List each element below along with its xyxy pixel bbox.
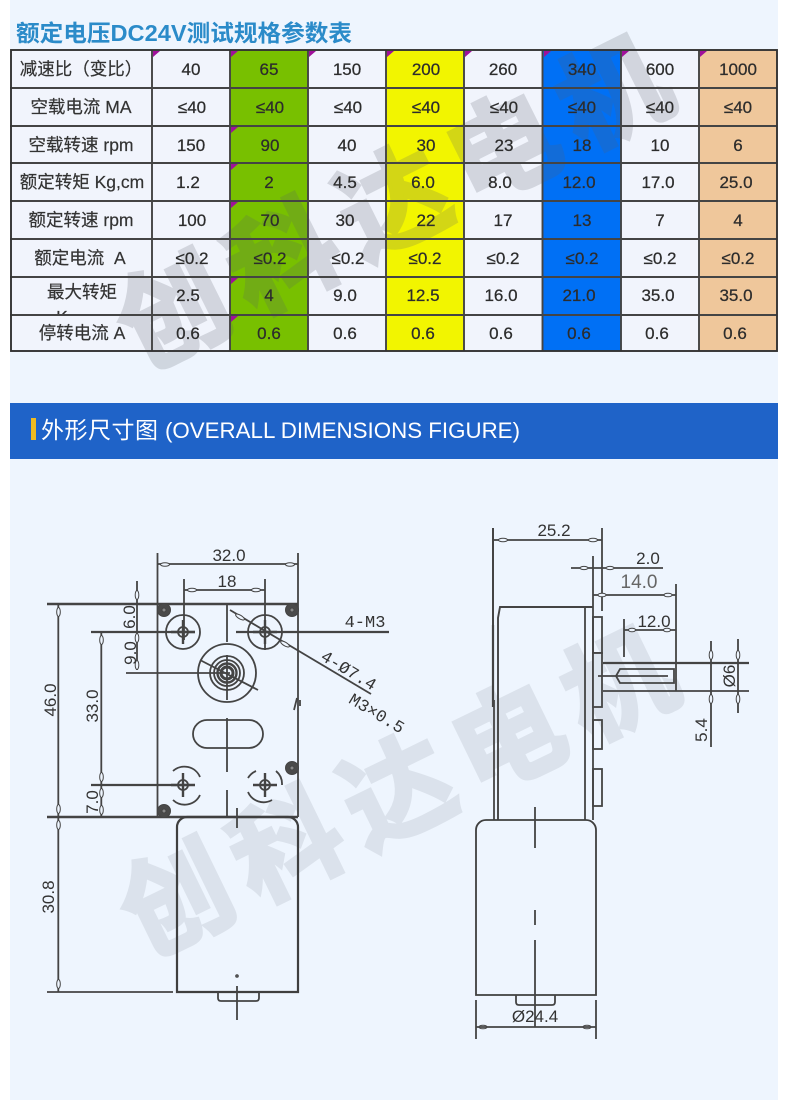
- output shaft boss: [198, 644, 258, 702]
- table row: no-load current: 空载电流 MA: [30, 97, 132, 117]
- dimension labels: front view: 18: [218, 572, 236, 591]
- oblong slot: [193, 720, 263, 748]
- table row: rated speed: 100: [178, 211, 206, 230]
- table row: rated speed: [28, 210, 743, 230]
- table row: maximum torque: 35.0: [641, 286, 675, 305]
- watermark: upper: 创科达电机: [98, 9, 703, 392]
- table row: reduction ratio: 200: [412, 60, 440, 79]
- table row: no-load current: ≤40: [490, 98, 518, 117]
- table row: rated torque: 6.0: [411, 173, 435, 192]
- table row: maximum torque: 最大转矩: [47, 282, 117, 302]
- table row: stall current: 0.6: [645, 324, 669, 343]
- table row: no-load current: ≤40: [568, 98, 596, 117]
- table row: reduction ratio: 260: [489, 60, 517, 79]
- gearbox side outline: [493, 528, 602, 820]
- table row: rated current: ≤0.2: [409, 249, 441, 268]
- table row: no-load speed: 23: [495, 136, 513, 155]
- watermark: lower: 创科达电机: [102, 600, 708, 979]
- table row: stall current: 0.6: [411, 324, 435, 343]
- table row: no-load current: ≤40: [334, 98, 362, 117]
- table row: reduction ratio: 65: [260, 60, 278, 79]
- table row: rated torque: 4.5: [333, 173, 357, 192]
- table row: maximum torque: 2.5: [176, 286, 200, 305]
- dimension labels: side view: 14.0: [621, 572, 657, 593]
- table row: rated torque: 1.2: [176, 173, 200, 192]
- table row: rated current: [34, 248, 754, 268]
- table row: rated current: 额定电流 A: [34, 248, 126, 268]
- table row: reduction ratio: 150: [333, 60, 361, 79]
- table row: rated speed: 30: [336, 211, 354, 230]
- table row: stall current: 0.6: [489, 324, 513, 343]
- table row: rated torque: 额定转矩 Kg,cm: [20, 172, 144, 192]
- dimension arrows: [57, 563, 295, 988]
- table row: no-load speed: 10: [651, 136, 669, 155]
- table row: stall current: 0.6: [257, 324, 281, 343]
- table row: maximum torque: 4: [264, 286, 274, 305]
- motor body front: [177, 808, 298, 1020]
- table row: rated speed: 13: [573, 211, 591, 230]
- table row: rated torque: 8.0: [488, 173, 512, 192]
- output shaft: [598, 584, 749, 691]
- dimension labels: side view: 12.0: [637, 612, 671, 631]
- corner screws: [158, 604, 298, 818]
- leader arrows: [235, 613, 290, 648]
- table row: stall current: 0.6: [176, 324, 200, 343]
- table row: rated speed: 7: [655, 211, 665, 230]
- table row: no-load speed: 150: [177, 136, 205, 155]
- table row: rated speed: 70: [261, 211, 279, 230]
- table row: maximum torque: 9.0: [333, 286, 357, 305]
- cell corner markers: [153, 51, 707, 322]
- table row: maximum torque: K: [56, 307, 68, 327]
- dimension labels: side view: Ø6: [720, 665, 739, 687]
- mounting holes lower: [171, 767, 282, 805]
- table row: no-load current: ≤40: [178, 98, 206, 117]
- gearbox side tabs: [593, 617, 602, 806]
- table row: rated current: ≤0.2: [644, 249, 676, 268]
- table row: no-load current: ≤40: [412, 98, 440, 117]
- table grid: [10, 50, 777, 351]
- hole leader line: [230, 610, 371, 694]
- section heading band: [10, 403, 778, 459]
- table row: no-load current: [30, 97, 752, 117]
- table row: rated speed: 4: [733, 211, 743, 230]
- table row: maximum torque: 16.0: [484, 286, 518, 305]
- table row: no-load current: ≤40: [646, 98, 674, 117]
- table row: rated torque: 25.0: [719, 173, 753, 192]
- dimension labels: side view: 25.2: [537, 521, 571, 540]
- front view drawing: [39, 546, 407, 1020]
- section heading band: (OVERALL DIMENSIONS FIGURE): [165, 418, 520, 443]
- dimension labels: side view: 5.4: [692, 718, 711, 742]
- dimension labels: front view: 4-Ø7.4: [317, 648, 379, 696]
- table row: no-load speed: [28, 135, 743, 155]
- table row: stall current: [39, 323, 747, 343]
- table row: no-load speed: 18: [573, 136, 591, 155]
- table row: maximum torque: 12.5: [406, 286, 440, 305]
- table row: rated torque: 2: [264, 173, 274, 192]
- table row: no-load speed: 30: [417, 136, 435, 155]
- dimension labels: front view: 46.0: [41, 683, 60, 717]
- dimension labels: front view: [39, 546, 407, 914]
- table row: maximum torque: [48, 282, 752, 314]
- section heading band: 外形尺寸图: [41, 417, 158, 443]
- side view drawing: [476, 521, 749, 1039]
- table row: stall current: 停转电流 A: [39, 323, 126, 343]
- table row: rated torque: 12.0: [562, 173, 596, 192]
- table row: stall current: 0.6: [333, 324, 357, 343]
- dimension labels: front view: 9.0: [121, 641, 140, 665]
- table row: rated current: ≤0.2: [254, 249, 286, 268]
- table row: rated speed: 17: [494, 211, 512, 230]
- table row: no-load speed: 6: [733, 136, 743, 155]
- dimension labels: front view: 33.0: [83, 689, 102, 723]
- table row: no-load current: ≤40: [256, 98, 284, 117]
- dimension labels: front view: 6.0: [120, 605, 139, 629]
- table row: reduction ratio: 600: [646, 60, 674, 79]
- table row: no-load speed: 90: [261, 136, 279, 155]
- title: rated voltage test table: 额定电压DC24V测试规格参数表: [16, 20, 352, 46]
- dimension labels: side view: [512, 521, 739, 1026]
- dimension labels: front view: 4-M3: [345, 614, 385, 633]
- dimension labels: front view: 32.0: [212, 546, 246, 565]
- table row: reduction ratio: 340: [568, 60, 596, 79]
- dimension labels: front view: 7.0: [83, 790, 102, 814]
- front view dimension lines: [47, 564, 298, 992]
- dimension labels: side view: Ø24.4: [512, 1007, 558, 1026]
- table row: reduction ratio: 40: [182, 60, 200, 79]
- dimension labels: side view: 2.0: [636, 549, 660, 568]
- dimension labels: front view: 30.8: [39, 880, 58, 914]
- table row: maximum torque: 35.0: [719, 286, 753, 305]
- table row: reduction ratio: [20, 59, 757, 79]
- table row: rated torque: [20, 172, 753, 192]
- table row: no-load current: ≤40: [724, 98, 752, 117]
- front view outline and extension lines: [47, 553, 389, 817]
- table row: rated torque: 17.0: [641, 173, 675, 192]
- table column fills: [10, 50, 777, 351]
- table row: rated speed: 额定转速 rpm: [28, 210, 134, 230]
- table row: stall current: 0.6: [723, 324, 747, 343]
- mounting holes upper: [166, 615, 282, 649]
- table row: reduction ratio: 减速比（变比）: [20, 59, 142, 79]
- table row: rated current: ≤0.2: [176, 249, 208, 268]
- table row: rated speed: 22: [417, 211, 435, 230]
- table row: rated current: ≤0.2: [487, 249, 519, 268]
- table row: stall current: 0.6: [567, 324, 591, 343]
- table row: rated current: ≤0.2: [566, 249, 598, 268]
- table row: maximum torque: 21.0: [562, 286, 596, 305]
- diameter dimension line: [476, 1000, 596, 1039]
- side view dimension arrows: [479, 538, 740, 1029]
- dimension labels: front view: M3×0.5: [345, 691, 407, 739]
- table row: reduction ratio: 1000: [719, 60, 757, 79]
- motor body side: [476, 807, 596, 1027]
- table row: no-load speed: 空载转速 rpm: [28, 135, 134, 155]
- table row: rated current: ≤0.2: [332, 249, 364, 268]
- table row: no-load speed: 40: [338, 136, 356, 155]
- side view dimension lines: [493, 540, 738, 747]
- table row: rated current: ≤0.2: [722, 249, 754, 268]
